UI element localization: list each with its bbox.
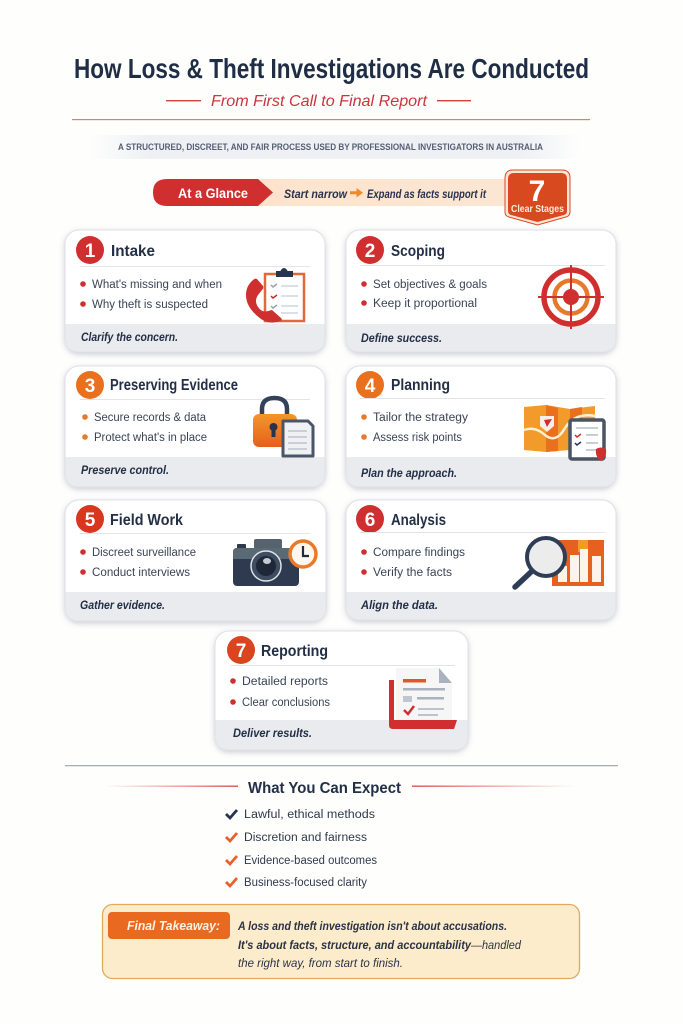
number badge 4: 4 (365, 376, 376, 397)
icon: phone and clipboard (246, 269, 304, 323)
icon: padlock and document (253, 398, 313, 456)
panel: 2 scoping (346, 230, 616, 352)
footer text: Align the data. (360, 598, 438, 612)
tagline band: A STRUCTURED, DISCREET, AND FAIR PROCESS USED BY PROFESSIONAL INVESTIGATORS IN AUSTRALIA (118, 142, 543, 153)
footer text: Preserve control. (81, 463, 169, 477)
number badge 7 (227, 636, 255, 664)
tagline band (90, 135, 580, 159)
heading: Planning (391, 377, 450, 394)
bullets: Tailor the strategy (373, 412, 468, 424)
number badge 7: 7 (236, 641, 246, 662)
number badge 2 (356, 236, 384, 264)
badge: 7 clear stages: 7 (529, 175, 545, 208)
subtitle: From First Call to Final Report (211, 93, 428, 110)
number badge 6 (356, 505, 384, 533)
panel: 3 preserving evidence (65, 366, 325, 487)
footer text: Gather evidence. (80, 598, 165, 612)
number badge 6: 6 (365, 510, 375, 531)
at a glance banner (153, 179, 513, 206)
number badge 1 (76, 236, 104, 264)
panel: 5 field work (65, 500, 326, 621)
bullets: Detailed reports (242, 676, 328, 688)
panel: 1 intake (65, 230, 325, 352)
panel: 7 reporting (215, 631, 468, 750)
bullets (361, 547, 465, 579)
bullets: Protect what's in place (94, 432, 207, 444)
bullets: Conduct interviews (92, 567, 190, 579)
checklist: Evidence-based outcomes (244, 855, 377, 867)
heading: Field Work (110, 512, 183, 529)
number badge 3 (76, 371, 104, 399)
takeaway tag (108, 912, 230, 939)
checklist: Business-focused clarity (244, 877, 367, 889)
bullets (80, 547, 196, 579)
heading: Analysis (391, 512, 446, 529)
at a glance banner: Start narrow (284, 189, 348, 201)
badge: 7 clear stages (505, 170, 570, 225)
takeaway text: the right way, from start to finish. (238, 958, 403, 970)
takeaway tag: Final Takeaway: (127, 918, 220, 933)
at a glance banner: Expand as facts support it (367, 189, 487, 201)
checklist: Discretion and fairness (244, 832, 367, 844)
bullets: Set objectives & goals (373, 279, 487, 291)
footer text: Deliver results. (233, 726, 312, 740)
icon: target (538, 265, 604, 329)
icon: map and checklist (524, 405, 606, 461)
bullets: Discreet surveillance (92, 547, 196, 559)
bullets: Secure records & data (94, 412, 207, 424)
panel: 6 analysis (346, 500, 616, 620)
icon: magnifier and bars (515, 538, 604, 587)
icon: report document (389, 668, 457, 729)
heading: Preserving Evidence (110, 377, 238, 394)
bullets (230, 676, 330, 709)
footer text: Plan the approach. (361, 466, 457, 480)
section heading: what you can expect: What You Can Expect (248, 780, 402, 797)
takeaway text (237, 921, 522, 970)
badge: 7 clear stages: Clear Stages (511, 204, 564, 215)
footer text: Clarify the concern. (81, 330, 178, 344)
number badge 3: 3 (85, 376, 95, 397)
bullets (361, 412, 468, 444)
bullets: Verify the facts (373, 567, 452, 579)
panel: 4 planning (346, 366, 616, 487)
heading: Scoping (391, 243, 445, 260)
bullets: Clear conclusions (242, 697, 330, 709)
number badge 5 (76, 505, 104, 533)
bullets: Why theft is suspected (92, 299, 208, 311)
takeaway text: A loss and theft investigation isn't about accusations. (237, 921, 507, 933)
checklist (226, 809, 377, 889)
icon: camera and clock (233, 539, 316, 586)
heading: Intake (111, 243, 155, 260)
number badge 1: 1 (85, 241, 96, 262)
number badge 4 (356, 371, 384, 399)
heading: Reporting (261, 643, 328, 660)
takeaway text: It's about facts, structure, and accountability—handled (238, 940, 522, 952)
footer text: Define success. (361, 331, 442, 345)
bullets: Assess risk points (373, 432, 462, 444)
callout: final takeaway (102, 904, 580, 978)
bullets (80, 279, 222, 311)
number badge 2: 2 (365, 241, 375, 262)
bullets: Keep it proportional (373, 298, 477, 310)
bullets: Compare findings (373, 547, 465, 559)
bullets (361, 279, 487, 310)
bullets (82, 412, 207, 444)
bullets: What's missing and when (92, 279, 222, 291)
at a glance banner: At a Glance (178, 185, 248, 201)
checklist: Lawful, ethical methods (244, 809, 375, 821)
number badge 5: 5 (85, 510, 96, 531)
